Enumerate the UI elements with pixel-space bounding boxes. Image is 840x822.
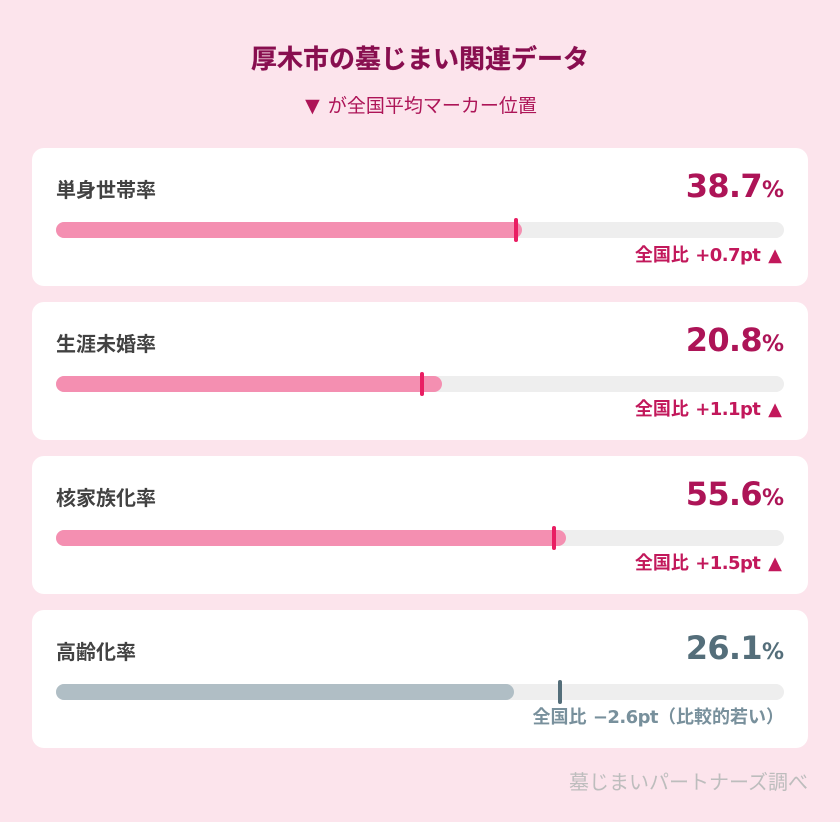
national average marker: [552, 526, 556, 550]
bar track and fill: [56, 222, 784, 238]
comparison note: 全国比 +1.5pt ▲: [635, 553, 782, 574]
comparison note: 全国比 +1.1pt ▲: [635, 399, 782, 420]
label: 単身世帯率: [56, 174, 156, 203]
title: 厚木市の墓じまい関連データ: [251, 39, 589, 76]
panel: single-person household rate: [32, 148, 808, 286]
label: 生涯未婚率: [56, 328, 156, 357]
value: 20.8%: [686, 321, 784, 359]
source footer: 墓じまいパートナーズ調べ: [569, 770, 808, 794]
comparison note: 全国比 +0.7pt ▲: [635, 245, 782, 266]
value: 38.7%: [686, 167, 784, 205]
panel: lifetime unmarried rate: [32, 302, 808, 440]
national average marker: [558, 680, 562, 704]
subtitle: marker legend: ▼ が全国平均マーカー位置: [305, 95, 537, 117]
panel: aging rate: [32, 610, 808, 748]
bar track and fill: [56, 530, 784, 546]
value: 55.6%: [686, 475, 784, 513]
comparison note: 全国比 −2.6pt（比較的若い）: [533, 707, 784, 728]
bar track and fill: [56, 684, 784, 700]
national average marker: [514, 218, 518, 242]
label: 核家族化率: [56, 482, 156, 511]
panel: nuclear family rate: [32, 456, 808, 594]
bar track and fill: [56, 376, 784, 392]
national average marker: [420, 372, 424, 396]
label: 高齢化率: [56, 636, 136, 665]
value: 26.1%: [686, 629, 784, 667]
